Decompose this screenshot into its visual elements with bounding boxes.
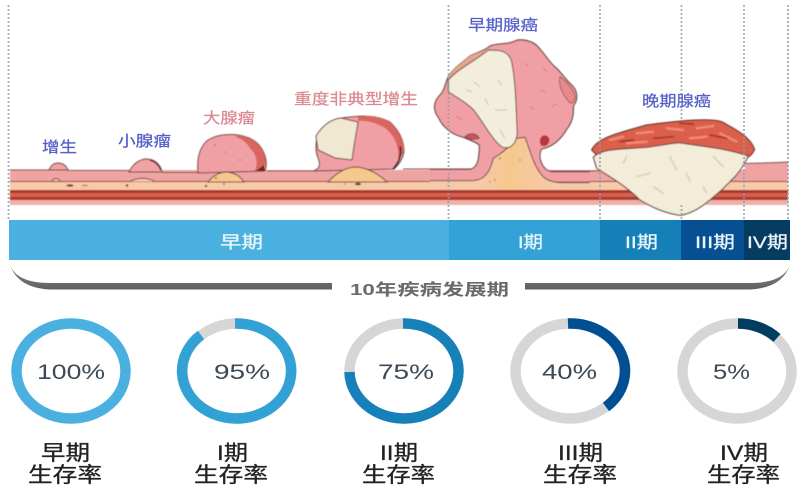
caption: stage I: 生存率 [194, 464, 268, 487]
ring: stage IV 5%: 5% [713, 361, 750, 384]
ring: early 100% [16, 324, 126, 418]
ring: stage II 75% [350, 323, 458, 418]
caption: stage III: III期 [558, 442, 603, 465]
timeline bracket [10, 265, 790, 299]
caption: stage III: 生存率 [543, 464, 617, 487]
segment: stage II: II期 [625, 233, 658, 252]
segment: early: 早期 [220, 233, 263, 252]
segment: stage IV [744, 220, 790, 260]
caption: stage IV: IV期 [720, 442, 768, 465]
segment: stage IV: IV期 [747, 233, 788, 252]
caption: stage II [362, 442, 435, 487]
ring: stage II 75%: 75% [378, 361, 434, 384]
polyp: large adenoma [198, 135, 266, 187]
caption: stage I: I期 [217, 442, 248, 465]
pathology labels [42, 17, 711, 156]
ring: early 100%: 100% [37, 361, 105, 384]
ring: stage I 95% [182, 323, 292, 418]
stage bar [9, 220, 790, 260]
colon wall layers [10, 162, 788, 205]
label: advanced adenocarcinoma: 晚期腺癌 [642, 93, 711, 110]
survival rings [16, 323, 792, 418]
survival captions [28, 442, 780, 487]
caption: stage I [194, 442, 268, 487]
polyp: hyperplasia [49, 163, 88, 187]
segment: stage I [449, 220, 600, 260]
segment: stage III [681, 220, 744, 260]
caption: stage III [543, 442, 617, 487]
stage divider dotted lines [8, 5, 788, 220]
polyp: small adenoma [126, 159, 162, 187]
segment: stage II [600, 220, 681, 260]
caption: stage IV [707, 442, 780, 487]
label: large adenoma: 大腺瘤 [203, 110, 255, 127]
illustration: colon wall with polyp progression [10, 40, 788, 215]
label: early adenocarcinoma: 早期腺癌 [468, 17, 538, 34]
caption: stage II: 生存率 [362, 464, 435, 487]
segment: stage III: III期 [695, 233, 735, 252]
heading: 10-year disease progression: 10年疾病发展期 [350, 280, 509, 299]
ring: stage I 95%: 95% [214, 361, 270, 384]
ring: stage IV 5% [682, 324, 792, 418]
caption: stage II: II期 [380, 442, 418, 465]
segment: stage I: I期 [518, 233, 543, 252]
label: severe dysplasia: 重度非典型增生 [294, 91, 418, 108]
caption: early [28, 442, 102, 487]
polyp: severe dysplasia [315, 116, 404, 185]
label: small adenoma: 小腺瘤 [118, 133, 171, 150]
caption: early: 生存率 [28, 464, 102, 487]
ring: stage III 40%: 40% [542, 361, 597, 384]
polyp: early adenocarcinoma [430, 40, 590, 190]
label: hyperplasia: 增生 [42, 139, 77, 156]
caption: early: 早期 [41, 442, 90, 465]
caption: stage IV: 生存率 [707, 464, 780, 487]
ring: stage III 40% [516, 323, 625, 418]
tumour: advanced adenocarcinoma [592, 120, 755, 215]
segment: early [9, 220, 449, 260]
